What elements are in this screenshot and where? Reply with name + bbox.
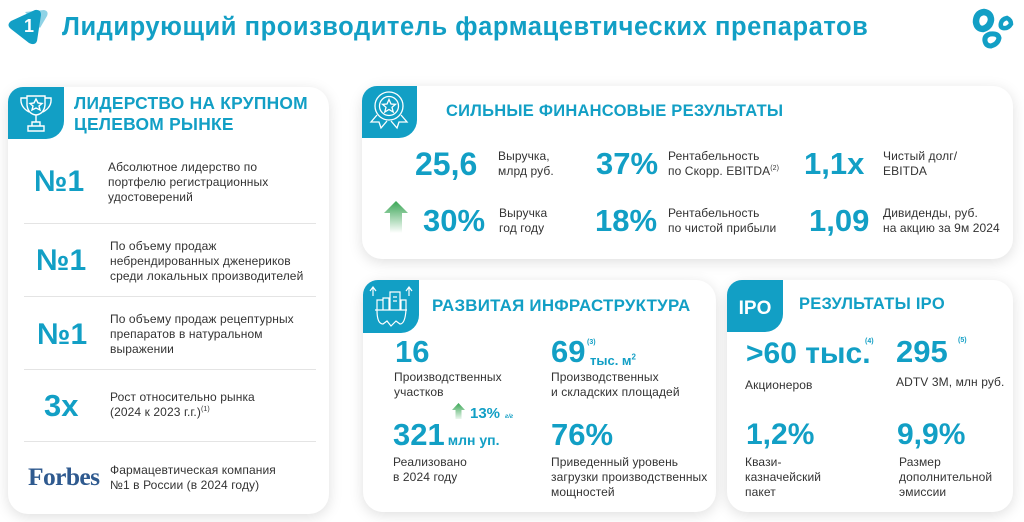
divider — [24, 369, 316, 370]
text: production sites — [394, 370, 502, 399]
stat: dividends: 1,09 — [809, 203, 869, 238]
logo: Forbes: Forbes — [28, 462, 99, 491]
text: prescription: По объему продаж рецептурных — [110, 312, 294, 326]
stat: revenue growth: 30% — [423, 203, 485, 238]
text: Forbes — [110, 463, 276, 492]
text: revenue: Выручка, — [498, 148, 550, 162]
text: shareholders: Акционеров — [745, 378, 813, 392]
text: EBITDA margin: по Скорр. EBITDA(2) — [668, 164, 779, 178]
text: ADTV: ADTV 3М, млн руб. — [896, 375, 1004, 389]
text: utilisation: мощностей — [551, 485, 615, 499]
icon: factory gear tab — [363, 280, 419, 333]
section number badge — [8, 10, 48, 44]
text: revenue growth: год году — [499, 220, 544, 234]
icon: trophy tab — [8, 87, 64, 139]
text: revenue — [498, 148, 554, 178]
text: market growth: (2024 к 2023 г.г.)(1) — [110, 405, 210, 419]
heading: IPO: РЕЗУЛЬТАТЫ IPO — [799, 295, 945, 313]
title: Лидирующий производитель фармацевтических препаратов — [62, 13, 868, 41]
text: licences: Абсолютное лидерство по — [108, 160, 257, 174]
text: licences: удостоверений — [108, 190, 193, 204]
text: floor area: и складских площадей — [551, 385, 680, 399]
divider — [24, 296, 316, 297]
footnote: 5: (5) — [958, 337, 967, 344]
text: production sites: Производственных — [394, 370, 502, 384]
icon: green up arrow — [384, 201, 408, 232]
icon: IPO tab — [727, 280, 783, 332]
icon: IPO tab: IPO — [739, 298, 771, 319]
stat: No1 prescription: №1 — [37, 318, 87, 351]
stat: utilisation: 76% — [551, 417, 613, 452]
text: prescription — [110, 312, 294, 356]
text: prescription: выражении — [110, 342, 174, 356]
divider — [24, 441, 316, 442]
text: licences — [108, 160, 268, 204]
text: Forbes: Фармацевтическая компания — [110, 463, 276, 477]
text: quasi-treasury: казначейский — [745, 470, 821, 484]
heading: leadership — [74, 93, 308, 134]
icon: small green arrow — [452, 403, 465, 419]
panel: financial results — [362, 86, 1013, 259]
text: licences: портфелю регистрационных — [108, 175, 268, 189]
text: units sold — [393, 455, 467, 484]
text: floor area: Производственных — [551, 370, 659, 384]
icon: company logo — [972, 8, 1014, 48]
text: quasi-treasury: Квази- — [745, 455, 782, 469]
heading: leadership: ЛИДЕРСТВО НА КРУПНОМ — [74, 93, 308, 113]
text: utilisation — [551, 455, 707, 499]
text: market growth: Рост относительно рынка — [110, 390, 255, 404]
heading: infrastructure: РАЗВИТАЯ ИНФРАСТРУКТУРА — [432, 296, 690, 315]
text: units sold: Реализовано — [393, 455, 467, 469]
footnote: 4: (4) — [865, 338, 874, 345]
text: EBITDA margin — [668, 148, 779, 178]
heading: financial results: СИЛЬНЫЕ ФИНАНСОВЫЕ РЕЗУЛЬТАТЫ — [446, 102, 783, 120]
stat: 3x: 3x — [44, 388, 78, 423]
text: generics: небрендированных дженериков — [110, 254, 291, 268]
panel: leadership — [8, 87, 329, 514]
text: utilisation: Приведенный уровень — [551, 455, 678, 469]
stat: shareholders: >60 тыс. — [746, 337, 871, 370]
text: Forbes: №1 в России (в 2024 году) — [110, 478, 259, 492]
text: net debt: Чистый долг/ — [883, 148, 957, 162]
text: net debt — [883, 148, 958, 178]
text: dividends: Дивиденды, руб. — [883, 206, 978, 220]
footnote: 3: (3) — [587, 339, 596, 346]
panel: IPO — [727, 280, 1013, 512]
text: dividends: на акцию за 9м 2024 — [883, 220, 1000, 234]
text: dividends — [883, 206, 1000, 234]
text: net margin — [668, 206, 776, 234]
stat: No1 generics: №1 — [36, 244, 86, 277]
text: generics: среди локальных производителей — [110, 268, 303, 282]
divider — [24, 223, 316, 224]
text: revenue growth: Выручка — [499, 206, 547, 220]
text: floor area — [551, 370, 680, 399]
stat: EBITDA margin: 37% — [596, 146, 658, 181]
section number badge: 1 — [24, 16, 34, 36]
stat: No1 licences: №1 — [34, 165, 84, 198]
text: prescription: препаратов в натуральном — [110, 326, 263, 340]
text: quasi-treasury: пакет — [745, 485, 776, 499]
text: revenue: млрд руб. — [498, 164, 554, 178]
text: utilisation: загрузки производственных — [551, 470, 707, 484]
text: additional issue — [899, 455, 992, 499]
text: net margin: по чистой прибыли — [668, 220, 776, 234]
text: additional issue: эмиссии — [899, 485, 946, 499]
text: additional issue: дополнительной — [899, 470, 992, 484]
text: market growth — [110, 390, 255, 419]
text: generics: По объему продаж — [110, 238, 217, 252]
stat: ADTV: 295 — [896, 334, 948, 369]
text: units sold: в 2024 году — [393, 470, 457, 484]
text: net margin: Рентабельность — [668, 206, 760, 220]
stat: net margin: 18% — [595, 203, 657, 238]
text: production sites: участков — [394, 385, 444, 399]
heading: leadership: ЦЕЛЕВОМ РЫНКЕ — [74, 114, 234, 134]
icon: medal tab — [362, 86, 417, 138]
stat: additional issue: 9,9% — [897, 418, 965, 451]
text: additional issue: Размер — [899, 455, 941, 469]
unit: floor area: тыс. м2 — [590, 353, 636, 368]
stat: revenue: 25,6 — [415, 146, 477, 182]
text: quasi-treasury — [745, 455, 821, 499]
text: generics — [110, 238, 303, 282]
stat: net debt: 1,1x — [804, 146, 864, 181]
stat: growth 13%: 13% г/г — [470, 405, 513, 422]
stat: quasi-treasury: 1,2% — [746, 418, 814, 451]
text: revenue growth — [499, 206, 548, 234]
text: EBITDA margin: Рентабельность — [668, 148, 760, 162]
text: net debt: EBITDA — [883, 164, 927, 178]
stat: units sold: 321млн уп. — [393, 417, 499, 452]
panel: infrastructure — [363, 280, 716, 512]
stat: floor area: 69 — [551, 334, 585, 369]
stat: production sites: 16 — [395, 334, 429, 369]
